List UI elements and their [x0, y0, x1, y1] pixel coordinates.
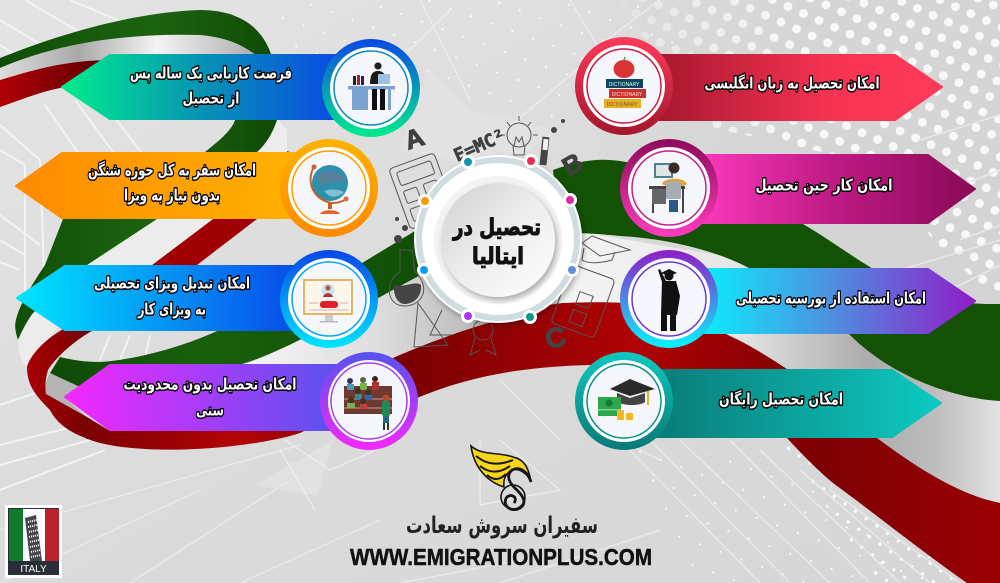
- flag stripes: [9, 509, 59, 561]
- circle badge: [280, 250, 378, 348]
- arrow banner: [65, 365, 345, 430]
- circle badge: [575, 37, 673, 135]
- circle badge: [620, 139, 718, 237]
- circle badge: [322, 39, 420, 137]
- doodle: test tube: [543, 119, 565, 165]
- arrow banner: [16, 153, 305, 218]
- label: امکان سفر به کل حوزه شنگن: [88, 160, 256, 180]
- icon: person at computer: [649, 162, 687, 213]
- doodle: graduation cap: [582, 236, 630, 263]
- doodle: flask: [389, 217, 424, 306]
- ribbon: left green sweep: [50, 228, 430, 387]
- panel: english study: [575, 37, 942, 135]
- ribbon: top white strand: [0, 35, 262, 80]
- ribbon: descending white strand: [18, 118, 287, 367]
- circle badge: [280, 139, 378, 237]
- hub: title: [452, 215, 541, 270]
- icon: cap and money: [598, 379, 655, 420]
- icon: man at desk: [348, 62, 395, 110]
- panel: work while studying: [620, 139, 975, 237]
- hub: inner disc: [441, 183, 555, 297]
- ribbon: descending green strand: [0, 10, 279, 340]
- doodle: calculator: [389, 153, 456, 229]
- ribbon: red right band: [340, 302, 1000, 583]
- arrow banner: [17, 266, 305, 330]
- icon: classroom: [344, 376, 392, 430]
- arrow banner: [650, 370, 941, 437]
- doodle: letter B: B: [557, 147, 588, 182]
- label: امکان تحصیل به زبان انگلیسی: [704, 74, 880, 92]
- icon: dictionaries and apple: DICTIONARY: [609, 82, 640, 88]
- arrow banner: [62, 55, 345, 119]
- panel: one year job search: [62, 39, 420, 137]
- hub: title: تحصیل در: [452, 215, 541, 241]
- label: به ویزای کار: [137, 300, 206, 318]
- label: از تحصیل: [182, 88, 240, 108]
- doodle: calculator lower: [551, 264, 615, 338]
- circle badge: [575, 352, 673, 450]
- hub: title: ایتالیا: [472, 244, 524, 270]
- hub: dots: [418, 156, 578, 322]
- label: امکان استفاده از بورسیه تحصیلی: [736, 288, 926, 308]
- label: فرصت کاریابی یک ساله پس: [130, 64, 292, 84]
- icon: dictionaries and apple: DICTIONARY: [612, 92, 643, 98]
- circle badge: [620, 250, 718, 348]
- circle badge: [320, 352, 418, 450]
- label: [88, 160, 256, 204]
- icon: tower of pisa: [25, 515, 42, 561]
- doodle: formula: E=MC²: [451, 125, 509, 167]
- panel: scholarship: [620, 250, 975, 348]
- science doodles: [389, 116, 630, 355]
- icon: dictionaries and apple: [604, 57, 646, 108]
- panel: no age limit: [65, 352, 418, 450]
- ribbon: top red strand: [0, 58, 110, 107]
- label: ITALY: [20, 564, 47, 575]
- badge: italy: [5, 505, 62, 578]
- doodle: letter C: C: [542, 320, 569, 355]
- panel: visa conversion: [17, 250, 378, 348]
- label: سنی: [196, 400, 224, 420]
- panel: free study: [575, 352, 941, 450]
- label: بدون نیاز به ویزا: [124, 186, 220, 204]
- ribbon: left white band: [240, 270, 510, 433]
- logo: website: WWW.EMIGRATIONPLUS.COM: [350, 544, 652, 570]
- doodle: set square: [414, 303, 452, 347]
- label: امکان تبدیل ویزای تحصیلی: [94, 274, 250, 292]
- ribbon: descending red strand: [60, 150, 290, 331]
- icon: globe: [311, 164, 348, 214]
- label: امکان کار حین تحصیل: [756, 176, 892, 194]
- central hub: [414, 155, 582, 323]
- ribbon: white right band: [540, 225, 1000, 503]
- doodle: ribbon badge: [470, 320, 496, 355]
- arrow banner: [650, 55, 942, 120]
- hub: outer ring: [414, 155, 582, 323]
- doodle: letter A: A: [401, 121, 428, 156]
- icon: dictionaries and apple: DICTIONARY: [607, 102, 638, 108]
- label: امکان تحصیل رایگان: [719, 390, 843, 408]
- icon: visa screen: [304, 280, 352, 322]
- doodle: light bulb: [500, 116, 538, 155]
- icon: graduate: [658, 269, 680, 331]
- logo: persian name: سفیران سروش سعادت: [406, 513, 598, 539]
- label: [94, 274, 250, 318]
- ribbon: grey loop fold: [45, 373, 110, 417]
- company logo: [350, 446, 652, 570]
- arrow banner: [690, 269, 975, 333]
- arrow banner: [690, 155, 975, 223]
- ribbon: lower red loop: [27, 331, 350, 450]
- label: [130, 64, 292, 108]
- ribbon: green right band: [553, 160, 1000, 401]
- panel: schengen travel: [16, 139, 378, 237]
- logo: wing mark: [471, 446, 531, 510]
- label: امکان تحصیل بدون محدودیت: [124, 374, 296, 394]
- label: [124, 374, 296, 420]
